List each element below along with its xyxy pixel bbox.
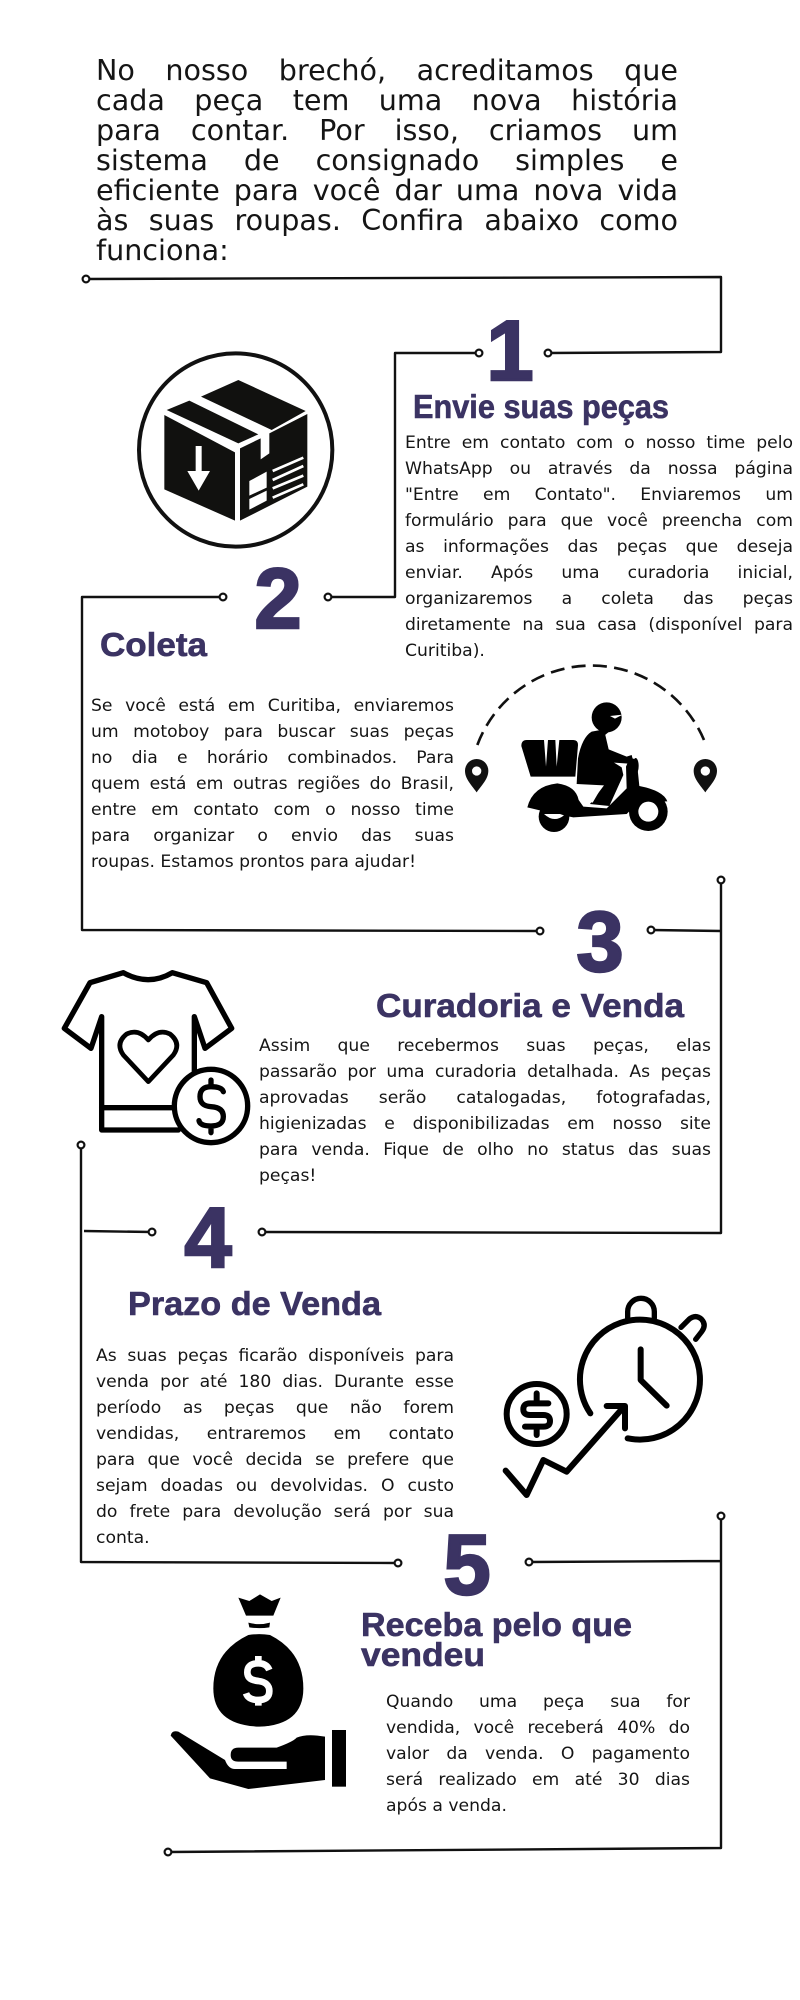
step 4 body text: do frete para devolução será por sua — [96, 1502, 454, 1522]
step 4 body text: vendidas, entraremos em contato — [96, 1424, 454, 1444]
heading: Receba pelo que vendeu: Receba pelo que — [361, 1606, 632, 1643]
icon: delivery scooter with route — [465, 666, 717, 832]
intro text: funciona: — [96, 233, 229, 267]
icon: money bag over open hand — [171, 1594, 346, 1789]
heading: Curadoria e Venda: Curadoria e Venda — [376, 987, 685, 1024]
connector: step 5 end — [165, 1513, 724, 1855]
step 1 body text: enviar. Após uma curadoria inicial, — [405, 563, 793, 583]
dashed route arc — [477, 666, 704, 745]
step 1 body text: as informações das peças que deseja — [405, 537, 793, 557]
step 4 body text: As suas peças ficarão disponíveis para — [96, 1346, 454, 1366]
number 3: 3 — [576, 895, 624, 990]
heading: Prazo de Venda: Prazo de Venda — [128, 1285, 382, 1322]
step 2 body text: no dia e horário combinados. Para — [91, 748, 454, 768]
heading: Envie suas peças: Envie suas peças — [413, 388, 669, 425]
step 5 body text: Quando uma peça sua for — [386, 1692, 690, 1712]
step 3 body text: passarão por uma curadoria detalhada. As peças — [259, 1062, 711, 1082]
step 4 body text: conta. — [96, 1528, 150, 1548]
icon: parcel box in circle — [139, 353, 332, 547]
icon: clock, coin and rising arrow — [506, 1298, 704, 1495]
intro text — [96, 53, 678, 267]
connector: step 3 to step 4 — [259, 877, 724, 1235]
step 2 body text: Se você está em Curitiba, enviaremos — [91, 696, 454, 716]
connector: step 1 to step 2 — [325, 350, 482, 600]
step 3 body text: para venda. Fique de olho no status das suas — [259, 1140, 711, 1160]
heading: Receba pelo que vendeu: vendeu — [361, 1636, 485, 1673]
step 3 body text: Assim que recebermos suas peças, elas — [259, 1036, 711, 1056]
step 1 body text: formulário para que você preencha com — [405, 511, 793, 531]
intro text: sistema de consignado simples e — [96, 143, 678, 177]
step 4 body text — [96, 1346, 454, 1548]
heading: Coleta: Coleta — [100, 626, 208, 663]
step 3 body text: peças! — [259, 1166, 316, 1186]
step 5 body text: valor da venda. O pagamento — [386, 1744, 690, 1764]
step 1 body text: Entre em contato com o nosso time pelo — [405, 433, 793, 453]
step 2 body text: um motoboy para buscar suas peças — [91, 722, 454, 742]
step 5 body text: após a venda. — [386, 1796, 507, 1816]
connector: step 4 to step 5 — [78, 1142, 401, 1566]
step 2 body text — [91, 696, 454, 872]
step 5 body text — [386, 1692, 690, 1816]
intro text: eficiente para você dar uma nova vida — [96, 173, 678, 207]
number 2: 2 — [254, 552, 302, 647]
left location pin — [465, 759, 488, 792]
step 3 body text — [259, 1036, 711, 1186]
step 5 body text: vendida, você receberá 40% do — [386, 1718, 690, 1738]
step 2 body text: para organizar o envio das suas — [91, 826, 454, 846]
rider and scooter — [521, 702, 668, 832]
step 4 body text: venda por até 180 dias. Durante esse — [96, 1372, 454, 1392]
right location pin — [694, 759, 717, 792]
step 2 body text: quem está em outras regiões do Brasil, — [91, 774, 454, 794]
step 1 body text — [405, 433, 793, 661]
step 2 body text: roupas. Estamos prontos para ajudar! — [91, 852, 416, 872]
number 5: 5 — [443, 1518, 491, 1613]
step 4 body text: período as peças que não forem — [96, 1398, 454, 1418]
step 1 body text: organizaremos a coleta das peças — [405, 589, 793, 609]
intro text: cada peça tem uma nova história — [96, 83, 678, 117]
step 3 body text: higienizadas e disponibilizadas em nosso site — [259, 1114, 711, 1134]
step 1 body text: diretamente na sua casa (disponível para — [405, 615, 793, 635]
intro text: No nosso brechó, acreditamos que — [96, 53, 678, 87]
intro text: para contar. Por isso, criamos um — [96, 113, 678, 147]
step 1 body text: Curitiba). — [405, 641, 485, 661]
number 1: 1 — [486, 304, 534, 399]
number 4: 4 — [184, 1191, 232, 1286]
step 1 body text: "Entre em Contato". Enviaremos um — [405, 485, 793, 505]
step 4 body text: sejam doadas ou devolvidas. O custo — [96, 1476, 454, 1496]
connector: step 2 to step 3 — [82, 594, 543, 934]
connector: intro to step 1 — [83, 276, 721, 356]
step 1 body text: WhatsApp ou através da nossa página — [405, 459, 793, 479]
heading: Receba pelo que vendeu — [361, 1606, 632, 1673]
intro text: às suas roupas. Confira abaixo como — [96, 203, 678, 237]
icon: t-shirt with heart and dollar coin — [64, 973, 248, 1143]
step 4 body text: para que você decida se prefere que — [96, 1450, 454, 1470]
step 2 body text: entre em contato com o nosso time — [91, 800, 454, 820]
step 3 body text: aprovadas serão catalogadas, fotografadas, — [259, 1088, 711, 1108]
step 5 body text: será realizado em até 30 dias — [386, 1770, 690, 1790]
